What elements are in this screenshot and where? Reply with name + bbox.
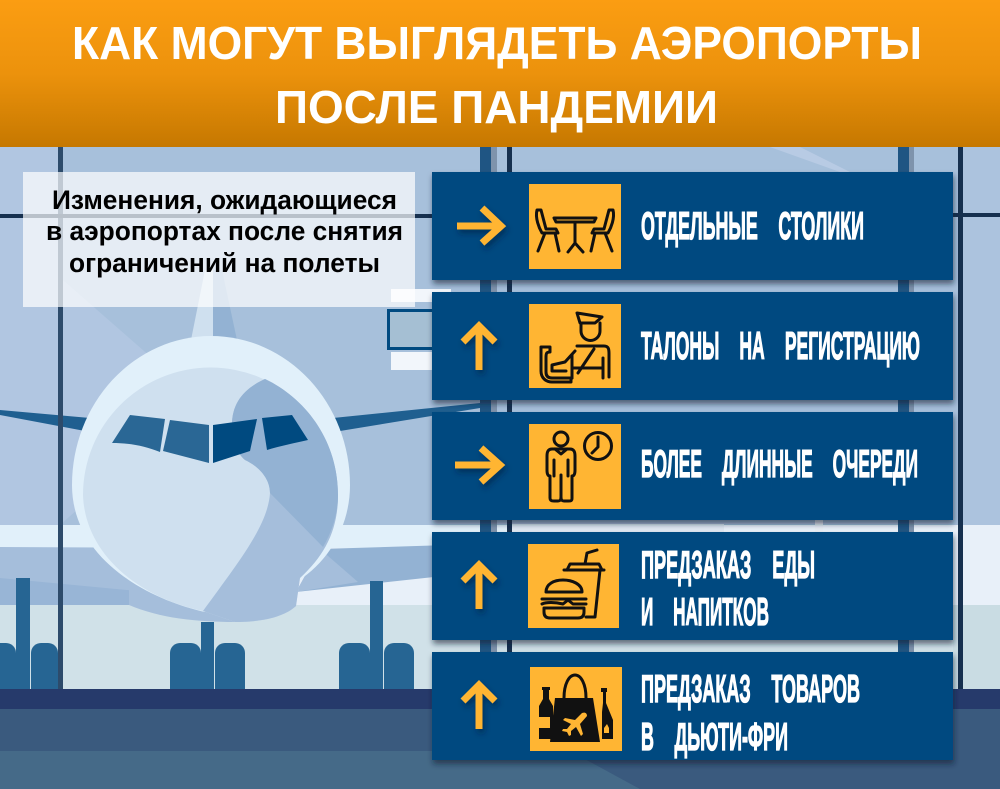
window mullions [0,147,1000,689]
title banner: КАК МОГУТ ВЫГЛЯДЕТЬ АЭРОПОРТЫ [72,17,922,69]
icon: duty free bag [530,667,622,751]
terminal building windows [388,289,823,532]
lower wings [0,525,710,605]
sign: longer queues [432,412,953,520]
title banner: ПОСЛЕ ПАНДЕМИИ [275,81,718,133]
cockpit windows [112,415,308,463]
subtitle panel: в аэропортах после снятия [46,216,403,246]
upper wings [0,403,480,431]
title banner [0,0,1000,147]
icon: person and clock [529,424,621,509]
landing gear [0,578,414,689]
label one and two: И НАПИТКОВ [641,591,769,634]
icon: burger and drink [528,544,619,628]
tail fin [191,270,237,340]
subtitle panel: ограничений на полеты [69,248,380,278]
label one and two: В ДЬЮТИ-ФРИ [641,716,788,759]
floor [0,689,1000,789]
subtitle panel: Изменения, ожидающиеся [52,185,397,215]
airport window background [0,147,1000,689]
icon: check-in officer [529,304,621,388]
label one and two [641,668,860,759]
sign: pre-order food [432,532,953,640]
arrow: up [463,565,495,609]
icon: table and chairs [529,184,621,269]
sign: separate tables [432,172,953,280]
arrow: unchanged [457,208,501,243]
sign: check-in tickets [432,292,953,400]
arrow: up [463,685,495,729]
subtitle panel [23,172,415,307]
airplane fuselage [72,336,350,622]
sign: pre-order duty free [432,652,953,760]
label one and two [641,544,815,634]
arrow: up [463,326,495,370]
arrow: unchanged [455,448,500,482]
